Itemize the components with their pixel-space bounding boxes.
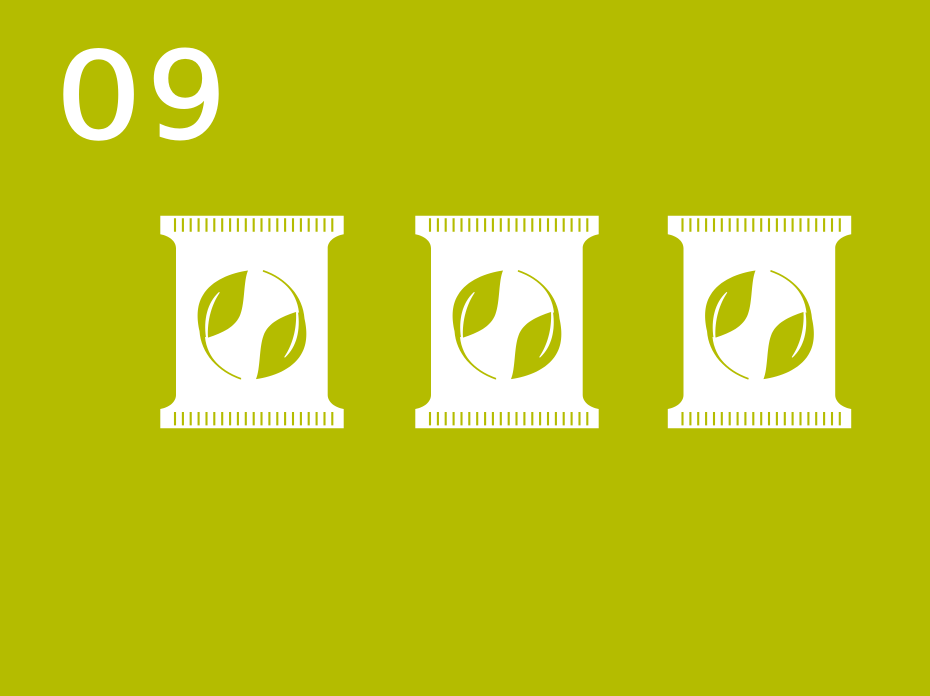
icon: seed packet 1: [160, 216, 344, 428]
heading: number 09: 9: [147, 26, 226, 166]
icon: seed packet 3: [668, 216, 851, 428]
heading: number 09: 0: [56, 27, 142, 167]
heading: number 09: [56, 26, 226, 167]
icon: seed packet 2: [415, 216, 599, 428]
